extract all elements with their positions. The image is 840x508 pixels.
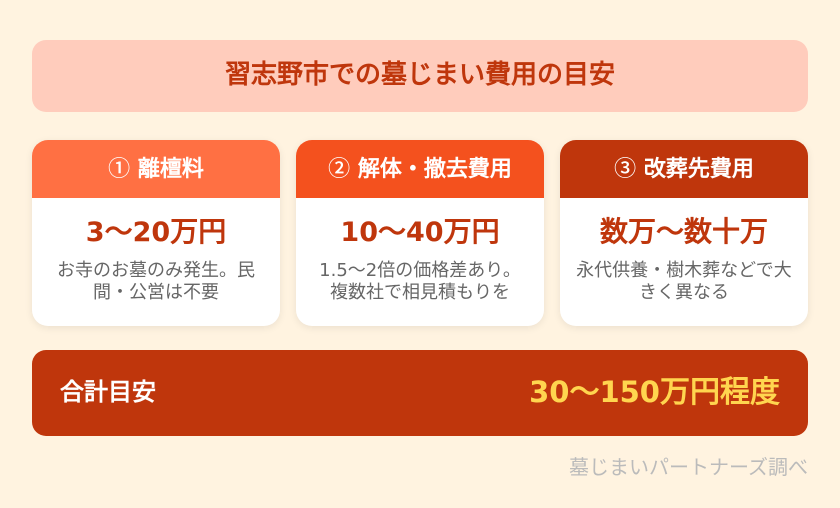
- card 3 heading: ③ 改葬先費用: [614, 151, 754, 183]
- card 1 heading: [32, 140, 280, 198]
- total label: 合計目安: [60, 378, 156, 406]
- panel: card 3: [560, 140, 808, 326]
- card 1 description: お寺のお墓のみ発生。民: [57, 260, 255, 281]
- card 2 heading: [296, 140, 544, 198]
- card 3 price: 数万～数十万: [600, 215, 768, 248]
- source note: 墓じまいパートナーズ調べ: [569, 455, 808, 479]
- card 1 heading: ① 離檀料: [108, 151, 204, 183]
- card 3 description: きく異なる: [639, 282, 729, 303]
- card 1 description: [57, 260, 255, 304]
- card 2 heading: ② 解体・撤去費用: [328, 151, 512, 183]
- title banner: [32, 40, 808, 112]
- card 3 heading: [560, 140, 808, 198]
- card 1 price: 3～20万円: [86, 215, 226, 248]
- card 2 price: 10～40万円: [340, 215, 500, 248]
- card 2 description: [319, 260, 521, 303]
- total amount: 30～150万円程度: [529, 375, 780, 410]
- panel: card 2: [296, 140, 544, 326]
- card 1 description: 間・公営は不要: [93, 278, 219, 304]
- card 3 description: [576, 256, 792, 303]
- panel: card 1: [32, 140, 280, 326]
- card 2 description: 1.5～2倍の価格差あり。: [319, 260, 521, 281]
- panel: total bar: [32, 350, 808, 436]
- card 2 description: 複数社で相見積もりを: [330, 282, 510, 303]
- card 3 description: 永代供養・樹木葬などで大: [576, 256, 792, 282]
- title banner: 習志野市での墓じまい費用の目安: [225, 60, 615, 90]
